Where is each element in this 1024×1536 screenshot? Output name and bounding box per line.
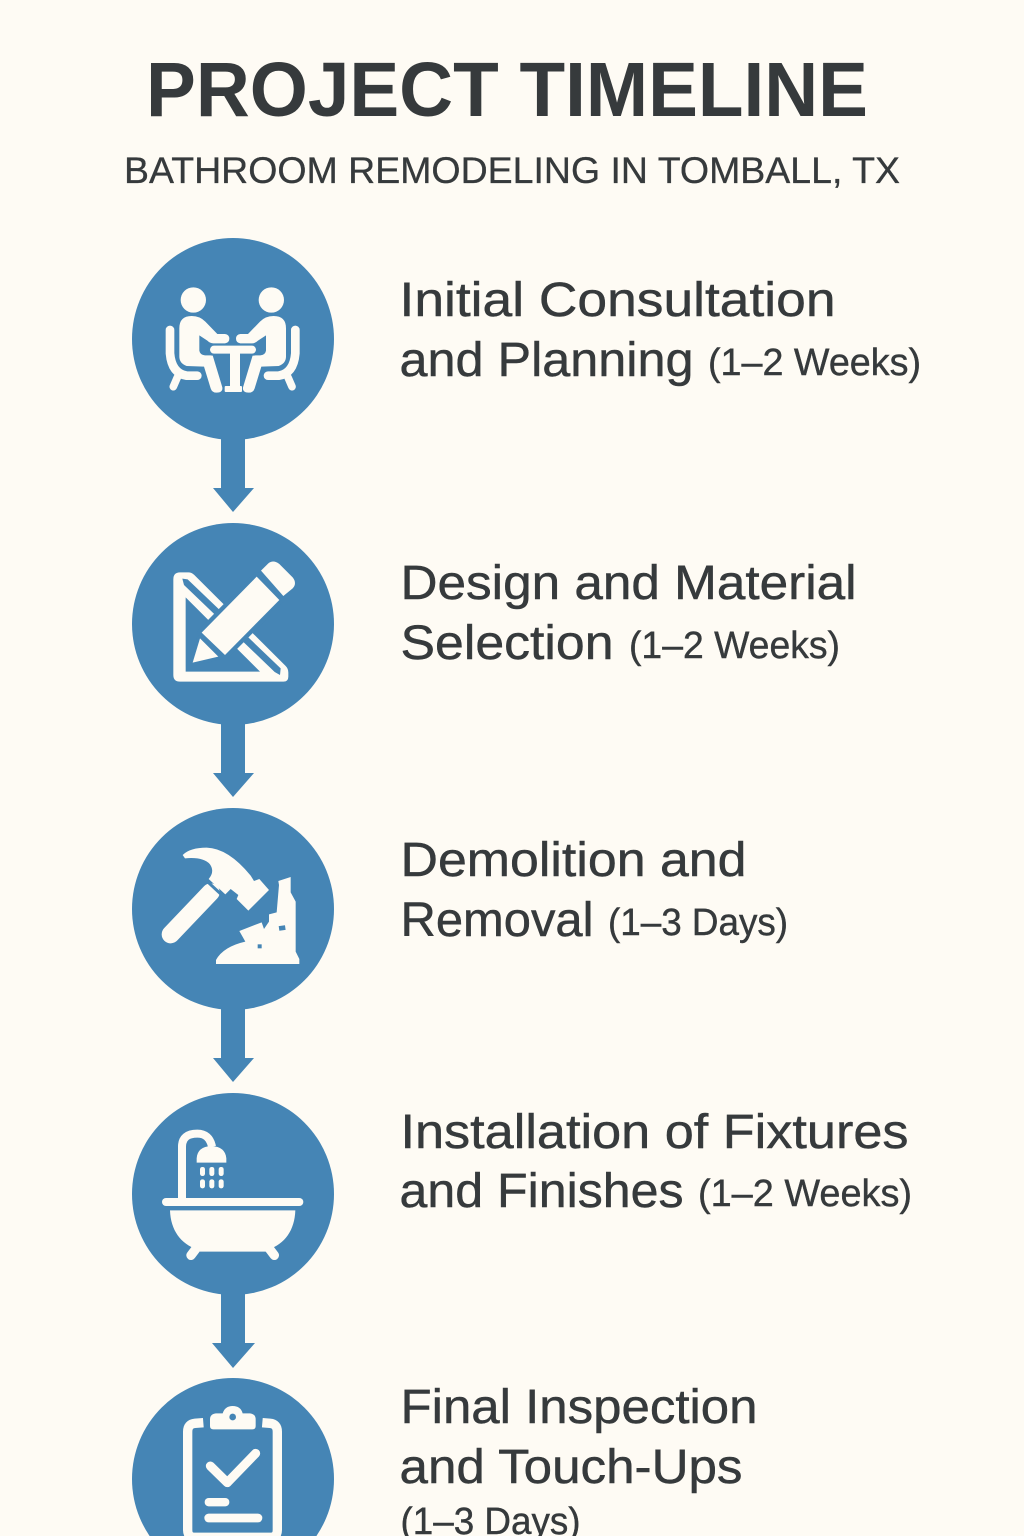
step 3 circle bbox=[132, 808, 334, 1010]
step 4 text bbox=[400, 1106, 912, 1218]
step 4: installation bbox=[132, 1093, 912, 1368]
step 3 text: Removal bbox=[400, 894, 594, 947]
step 3: demolition bbox=[132, 808, 788, 1082]
arrow 4 bbox=[212, 1285, 255, 1368]
step 1 circle bbox=[132, 238, 334, 440]
step 3 text bbox=[400, 834, 788, 947]
step 5 text: and Touch-Ups bbox=[400, 1441, 742, 1494]
step 2 text: Selection bbox=[400, 617, 614, 670]
icon: hammer and rubble bbox=[171, 848, 299, 964]
step 4 text: Installation of Fixtures bbox=[400, 1106, 908, 1159]
step 5: final inspection bbox=[132, 1378, 758, 1536]
step 2 text bbox=[400, 557, 856, 670]
step 3 text: Demolition and bbox=[400, 834, 746, 887]
step 1 text: and Planning bbox=[400, 334, 694, 387]
step 4 text: and Finishes bbox=[400, 1165, 684, 1218]
step 5 circle bbox=[132, 1378, 334, 1536]
step 1 text: Initial Consultation bbox=[400, 274, 836, 327]
arrow 3 bbox=[213, 1000, 254, 1082]
step 1 text: (1–2 Weeks) bbox=[708, 342, 921, 384]
icon: clipboard with check bbox=[188, 1406, 277, 1536]
icon: two people meeting at a table bbox=[170, 287, 295, 393]
step 2 text: Design and Material bbox=[400, 557, 856, 610]
icon: bathtub with shower bbox=[162, 1134, 303, 1255]
step 4 circle bbox=[132, 1093, 334, 1295]
arrow 1 bbox=[213, 430, 254, 512]
step 4 text: (1–2 Weeks) bbox=[698, 1173, 912, 1215]
subtitle: BATHROOM REMODELING IN TOMBALL, TX bbox=[124, 150, 900, 191]
title: PROJECT TIMELINE bbox=[146, 47, 868, 133]
step 2: design bbox=[132, 523, 856, 797]
icon: ruler and pencil bbox=[173, 561, 295, 682]
step 2 circle bbox=[132, 523, 334, 725]
step 1 text bbox=[400, 274, 921, 387]
step 3 text: (1–3 Days) bbox=[608, 902, 788, 944]
arrow 2 bbox=[213, 715, 254, 797]
step 1: consultation bbox=[132, 238, 921, 512]
step 5 text: Final Inspection bbox=[400, 1381, 758, 1434]
step 5 text bbox=[400, 1381, 758, 1536]
step 2 text: (1–2 Weeks) bbox=[629, 625, 840, 667]
